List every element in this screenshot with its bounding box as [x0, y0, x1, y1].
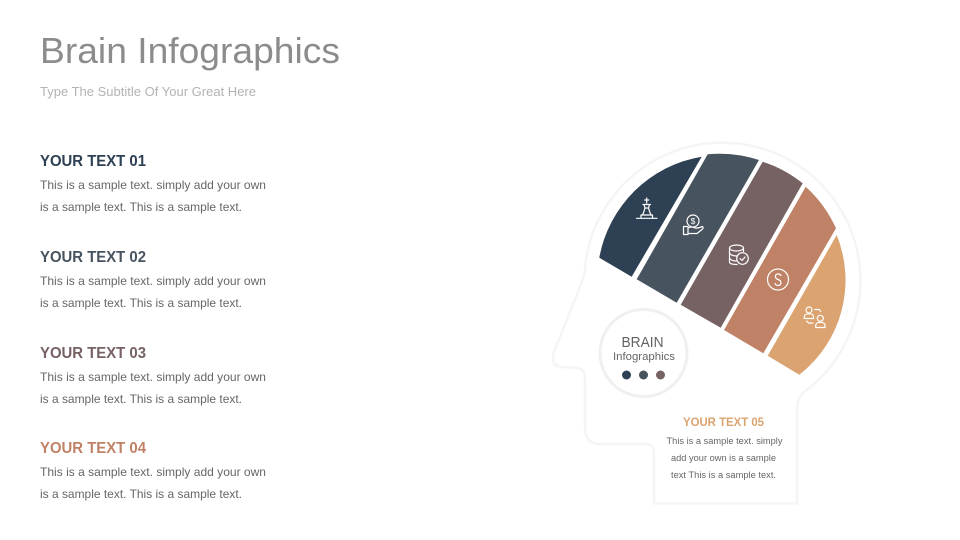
text block 03: YOUR TEXT 03 — [40, 345, 146, 362]
center badge: BRAIN — [622, 335, 664, 351]
text block 01: This is a sample text. simply add your own — [40, 178, 266, 192]
text block 01: is a sample text. This is a sample text. — [40, 200, 242, 214]
icon: dollar coin — [768, 269, 788, 290]
brain band 1 — [599, 157, 702, 277]
text block 05: text This is a sample text. — [671, 470, 776, 480]
text block 03 — [40, 345, 266, 406]
text block 04 — [40, 440, 266, 501]
icon: database check — [730, 245, 748, 264]
text block 02 — [40, 249, 266, 310]
text block 04: is a sample text. This is a sample text. — [40, 487, 242, 501]
brain band 4 — [724, 187, 836, 353]
text block 01 — [40, 153, 266, 214]
subtitle: Type The Subtitle Of Your Great Here — [40, 85, 256, 99]
head silhouette outline — [553, 143, 860, 504]
title: Brain Infographics — [40, 30, 340, 71]
text block 05: YOUR TEXT 05 — [683, 415, 764, 429]
text block 02: This is a sample text. simply add your own — [40, 274, 266, 288]
icon: hand holding coin — [684, 215, 703, 234]
icon: chess king — [636, 198, 657, 218]
text block 05: This is a sample text. simply — [666, 436, 783, 446]
icon: people exchange — [804, 307, 825, 328]
brain band 5 — [768, 235, 846, 375]
center badge: Infographics — [613, 351, 676, 363]
text block 04: YOUR TEXT 04 — [40, 440, 146, 457]
icon: hand holding coin: $ — [691, 216, 696, 226]
brain band 2 — [637, 154, 759, 303]
center badge — [600, 310, 687, 396]
text block 01: YOUR TEXT 01 — [40, 153, 146, 170]
text block 02: YOUR TEXT 02 — [40, 249, 146, 266]
text block 03: This is a sample text. simply add your own — [40, 370, 266, 384]
text block 05: add your own is a sample — [671, 453, 776, 463]
text block 02: is a sample text. This is a sample text. — [40, 296, 242, 310]
text block 04: This is a sample text. simply add your own — [40, 465, 266, 479]
text block 05 — [666, 415, 783, 480]
brain band 3 — [681, 162, 803, 328]
text block 03: is a sample text. This is a sample text. — [40, 392, 242, 406]
